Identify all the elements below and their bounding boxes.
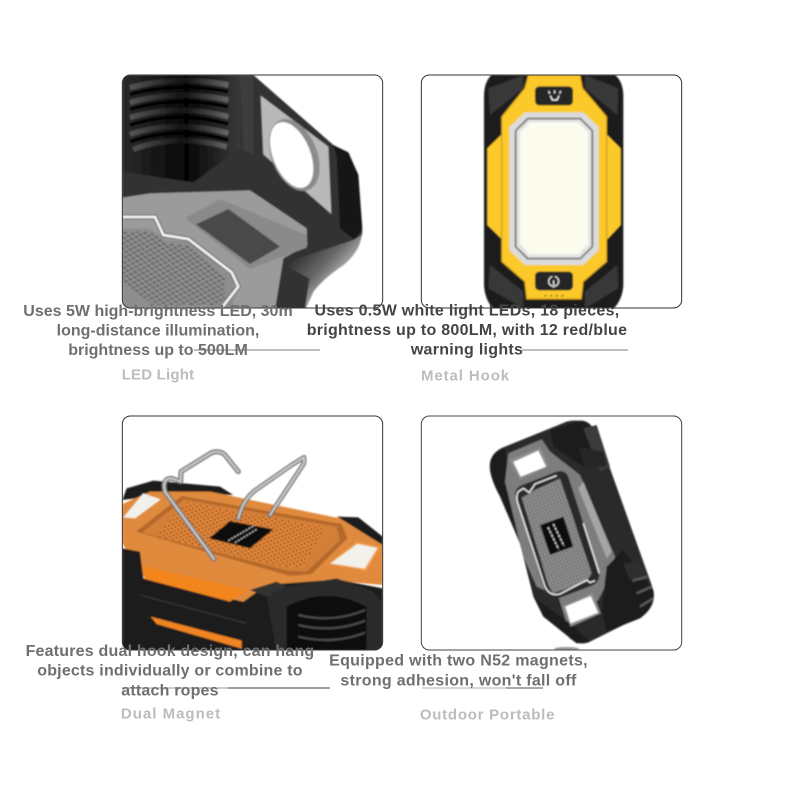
- power button: [535, 272, 573, 290]
- metal hook outline: [517, 476, 599, 595]
- description: dual hook: objects individually or combine to: [37, 662, 303, 680]
- description: dual hook: Features dual hook design, can hang: [26, 643, 314, 660]
- lamp body: [122, 75, 362, 310]
- perforated plate: [122, 228, 233, 310]
- leader line: dual magnet: [122, 687, 228, 689]
- panel: LED light photo: [122, 75, 383, 310]
- description: LED light: brightness up to 500LM: [68, 342, 248, 359]
- grey face plate: [122, 190, 307, 310]
- perforated plate: [515, 471, 599, 599]
- label: Dual Magnet: Dual Magnet: [121, 706, 221, 722]
- screen: [196, 209, 280, 264]
- panel: dual hook photo: [122, 416, 383, 652]
- black lower body: [122, 548, 383, 652]
- description: LED light: long-distance illumination,: [57, 322, 259, 340]
- description: metal hook: brightness up to 800LM, with 12 red/blue: [307, 322, 627, 339]
- description: magnets: strong adhesion, won't fall off: [340, 672, 577, 690]
- description: metal hook: Uses 0.5W white light LEDs, 18 pieces,: [315, 302, 619, 320]
- label: Metal Hook: Metal Hook: [421, 368, 510, 384]
- grey face: [505, 439, 615, 623]
- label: Outdoor Portable: Outdoor Portable: [420, 706, 555, 724]
- end cap with ribs: [250, 578, 383, 652]
- logo label: [540, 517, 573, 555]
- orange side panel: [143, 566, 247, 602]
- rubber grip with ribs: [122, 75, 253, 182]
- description: magnets: Equipped with two N52 magnets,: [329, 652, 588, 670]
- black body: [484, 75, 623, 309]
- orange lower strip: [151, 617, 242, 649]
- screen surround: [185, 199, 307, 269]
- recessed well: [136, 496, 347, 576]
- orange top surface: [122, 492, 383, 602]
- white windows: [123, 493, 161, 518]
- black end bumpers: [550, 420, 592, 466]
- leader line: dual magnet dark: [228, 687, 330, 689]
- leader line: outdoor portable dark: [506, 687, 543, 689]
- panel: outdoor portable photo: [421, 416, 682, 651]
- top mode button: [535, 86, 573, 105]
- leader line: outdoor portable: [422, 687, 506, 689]
- infographic canvas: [24, 74, 682, 722]
- description: metal hook: warning lights: [410, 342, 523, 358]
- panel: metal hook photo: [421, 75, 682, 309]
- description: dual hook: attach ropes: [121, 682, 219, 700]
- metal hook: [122, 217, 238, 310]
- leader line: metal hook: [522, 349, 628, 351]
- battery dots: [545, 294, 563, 298]
- white window bottom: [563, 593, 601, 627]
- metal hooks: [164, 452, 304, 559]
- light panel: [520, 122, 588, 254]
- light panel: [261, 96, 331, 214]
- yellow housing: [487, 75, 621, 299]
- black bumpers: [122, 481, 233, 500]
- label: LED Light: LED Light: [122, 366, 194, 384]
- description: LED light: Uses 5W high-brightness LED, 30m: [23, 303, 293, 320]
- white window top: [509, 447, 548, 479]
- perforated plate: [155, 503, 325, 567]
- LED lens: [268, 118, 320, 192]
- dark outer body: [490, 421, 653, 644]
- leader line: LED light: [194, 349, 320, 351]
- silver bezel: [509, 112, 599, 265]
- logo label: [209, 521, 273, 548]
- shadow under lamp: [554, 647, 579, 651]
- end cap shading: [287, 235, 362, 310]
